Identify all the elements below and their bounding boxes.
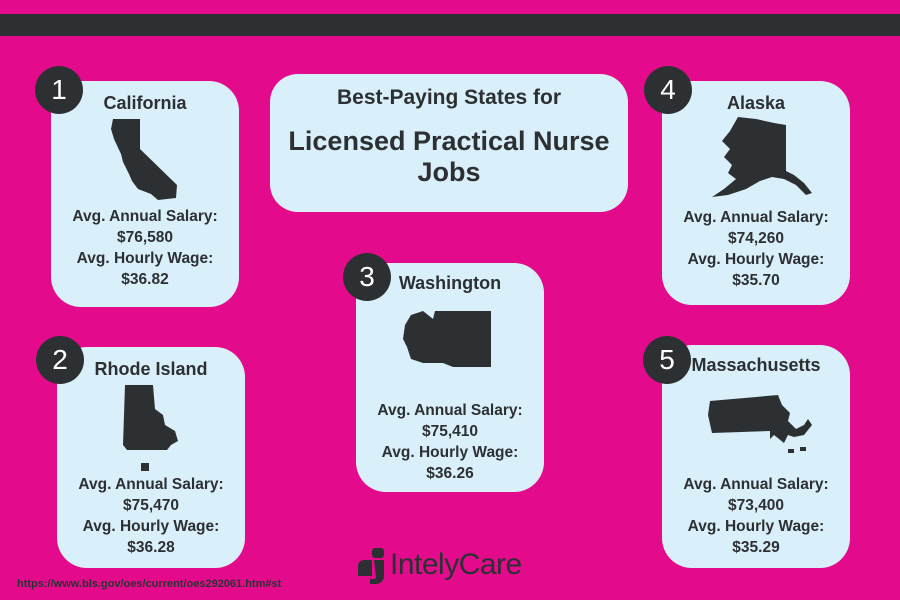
badge 4: 4 bbox=[660, 74, 676, 105]
card 3 Washington: Avg. Annual Salary: bbox=[377, 402, 523, 419]
badge 1 bbox=[35, 66, 83, 114]
card 2 Rhode Island: Rhode Island bbox=[94, 359, 208, 379]
card 2 Rhode Island: Avg. Annual Salary: bbox=[78, 476, 224, 493]
card 5 Massachusetts: $35.29 bbox=[732, 539, 780, 556]
top bar bbox=[0, 14, 900, 36]
card 1 California: Avg. Annual Salary: bbox=[72, 208, 218, 225]
badge 5 bbox=[643, 336, 691, 384]
card 3 Washington: $36.26 bbox=[426, 465, 474, 482]
card 5 Massachusetts: Avg. Hourly Wage: bbox=[688, 518, 824, 535]
badge 1: 1 bbox=[51, 74, 67, 105]
badge 3 bbox=[343, 253, 391, 301]
card 3 Washington: $75,410 bbox=[422, 423, 478, 440]
source text: https://www.bls.gov/oes/current/oes292061.htm#st bbox=[17, 578, 281, 590]
card 2 Rhode Island bbox=[57, 347, 245, 568]
card 4 Alaska: Alaska bbox=[727, 93, 785, 113]
card 3 Washington bbox=[356, 263, 544, 492]
icon: Rhode Island map bbox=[123, 385, 178, 471]
icon: Washington map bbox=[403, 311, 491, 367]
badge 3: 3 bbox=[359, 261, 375, 292]
card 1 California: Avg. Hourly Wage: bbox=[77, 250, 213, 267]
card 2 Rhode Island: $75,470 bbox=[123, 497, 179, 514]
card 3 Washington: Avg. Hourly Wage: bbox=[382, 444, 518, 461]
card 1 California: $36.82 bbox=[121, 271, 169, 288]
badge 5: 5 bbox=[659, 344, 675, 375]
card 4 Alaska: $74,260 bbox=[728, 230, 784, 247]
badge 4 bbox=[644, 66, 692, 114]
card 2 Rhode Island: Avg. Hourly Wage: bbox=[83, 518, 219, 535]
card 4 Alaska bbox=[662, 81, 850, 305]
title panel: Jobs bbox=[417, 157, 481, 187]
card 5 Massachusetts: Avg. Annual Salary: bbox=[683, 476, 829, 493]
card 2 Rhode Island: $36.28 bbox=[127, 539, 175, 556]
logo: IntelyCare: IntelyCare bbox=[390, 548, 522, 581]
icon: Massachusetts map bbox=[708, 395, 812, 453]
card 1 California bbox=[51, 81, 239, 307]
title panel bbox=[270, 74, 628, 212]
icon: California map bbox=[111, 119, 177, 200]
card 4 Alaska: $35.70 bbox=[732, 272, 780, 289]
card 4 Alaska: Avg. Annual Salary: bbox=[683, 209, 829, 226]
icon: Alaska map bbox=[712, 117, 812, 197]
card 1 California: California bbox=[103, 93, 186, 113]
card 5 Massachusetts bbox=[662, 345, 850, 568]
card 1 California: $76,580 bbox=[117, 229, 173, 246]
badge 2: 2 bbox=[52, 344, 68, 375]
title panel: Best-Paying States for bbox=[337, 86, 561, 109]
title panel: Licensed Practical Nurse bbox=[288, 126, 610, 156]
card 3 Washington: Washington bbox=[399, 273, 501, 293]
card 4 Alaska: Avg. Hourly Wage: bbox=[688, 251, 824, 268]
card 5 Massachusetts: $73,400 bbox=[728, 497, 784, 514]
badge 2 bbox=[36, 336, 84, 384]
card 5 Massachusetts: Massachusetts bbox=[691, 355, 821, 375]
